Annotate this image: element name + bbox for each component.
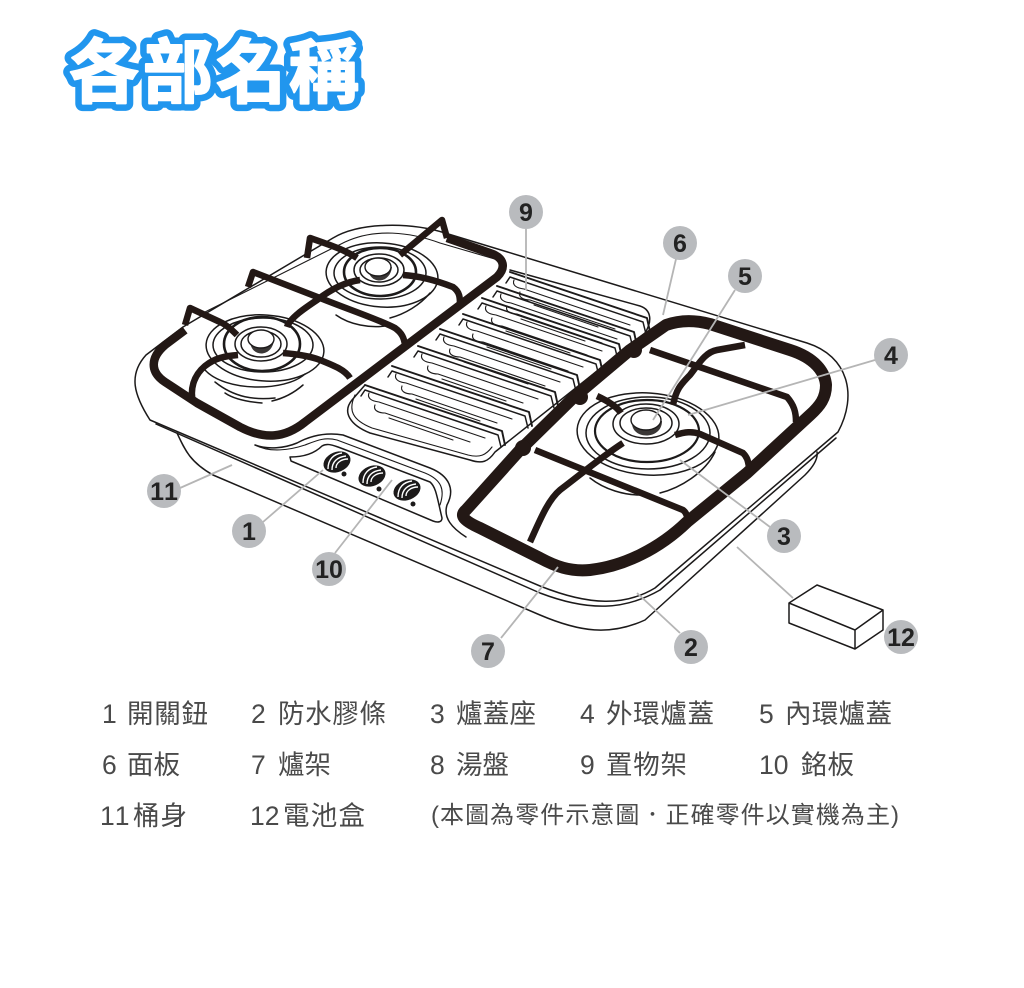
callout badges — [147, 195, 918, 668]
title: 部 — [143, 17, 213, 118]
badge 5 — [728, 259, 762, 293]
badge 1: 1 — [242, 518, 256, 546]
title: 名 — [216, 17, 286, 118]
legend: 電池盒 — [283, 801, 365, 831]
burner: rear left — [324, 239, 440, 327]
legend: 1 — [102, 699, 117, 729]
legend: 置物架 — [606, 750, 687, 780]
stove body — [135, 225, 848, 630]
badge 11: 11 — [150, 478, 178, 506]
badge 10: 10 — [315, 556, 343, 584]
title: 名 — [216, 17, 286, 118]
badge 6: 6 — [673, 230, 687, 258]
legend: 6 — [102, 750, 117, 780]
burner: right — [574, 388, 722, 495]
knobs — [320, 447, 424, 506]
badge 1 — [232, 514, 266, 548]
title: 部 — [143, 17, 213, 118]
title — [69, 17, 359, 118]
badge 4 — [874, 338, 908, 372]
badge 12: 12 — [887, 624, 915, 652]
badge 11 — [147, 474, 181, 508]
legend: 8 — [430, 750, 445, 780]
legend: 開關鈕 — [127, 699, 208, 729]
badge 3: 3 — [777, 523, 791, 551]
legend: 桶身 — [133, 801, 187, 831]
grate: right — [463, 321, 826, 570]
legend — [100, 699, 899, 831]
legend: 12 — [250, 801, 279, 831]
stove illustration — [135, 220, 848, 630]
legend: (本圖為零件示意圖．正確零件以實機為主) — [431, 802, 899, 829]
title: 各 — [69, 17, 139, 118]
badge 3 — [767, 519, 801, 553]
legend: 3 — [430, 699, 445, 729]
title: 稱 — [289, 17, 359, 118]
badge 5: 5 — [738, 263, 752, 291]
central trivet rack — [348, 270, 650, 462]
legend: 2 — [251, 699, 266, 729]
legend: 內環爐蓋 — [785, 699, 892, 729]
badge 6 — [663, 226, 697, 260]
legend: 爐架 — [278, 750, 331, 780]
badge 7: 7 — [481, 638, 495, 666]
legend: 4 — [580, 699, 595, 729]
burner: front left — [204, 311, 326, 403]
badge 10 — [312, 552, 346, 586]
badge 7 — [471, 634, 505, 668]
legend: 面板 — [127, 750, 180, 780]
legend: 防水膠條 — [278, 699, 386, 729]
legend: 7 — [251, 750, 266, 780]
badge 12 — [884, 620, 918, 654]
legend: 10 — [759, 750, 788, 780]
legend: 銘板 — [801, 750, 854, 780]
badge 2 — [674, 630, 708, 664]
title: 稱 — [289, 17, 359, 118]
legend: 外環爐蓋 — [606, 699, 714, 729]
badge 9 — [509, 195, 543, 229]
badge 2: 2 — [684, 634, 698, 662]
leader lines — [180, 229, 875, 638]
badge 9: 9 — [519, 199, 533, 227]
legend: 5 — [759, 699, 774, 729]
badge 4: 4 — [884, 342, 898, 370]
title: 各 — [69, 17, 139, 118]
legend: 爐蓋座 — [456, 699, 536, 729]
battery box — [789, 585, 883, 649]
legend: 9 — [580, 750, 595, 780]
control panel — [255, 434, 466, 537]
legend: 11 — [100, 801, 129, 831]
legend: 湯盤 — [456, 750, 509, 780]
grate: left — [154, 220, 503, 436]
